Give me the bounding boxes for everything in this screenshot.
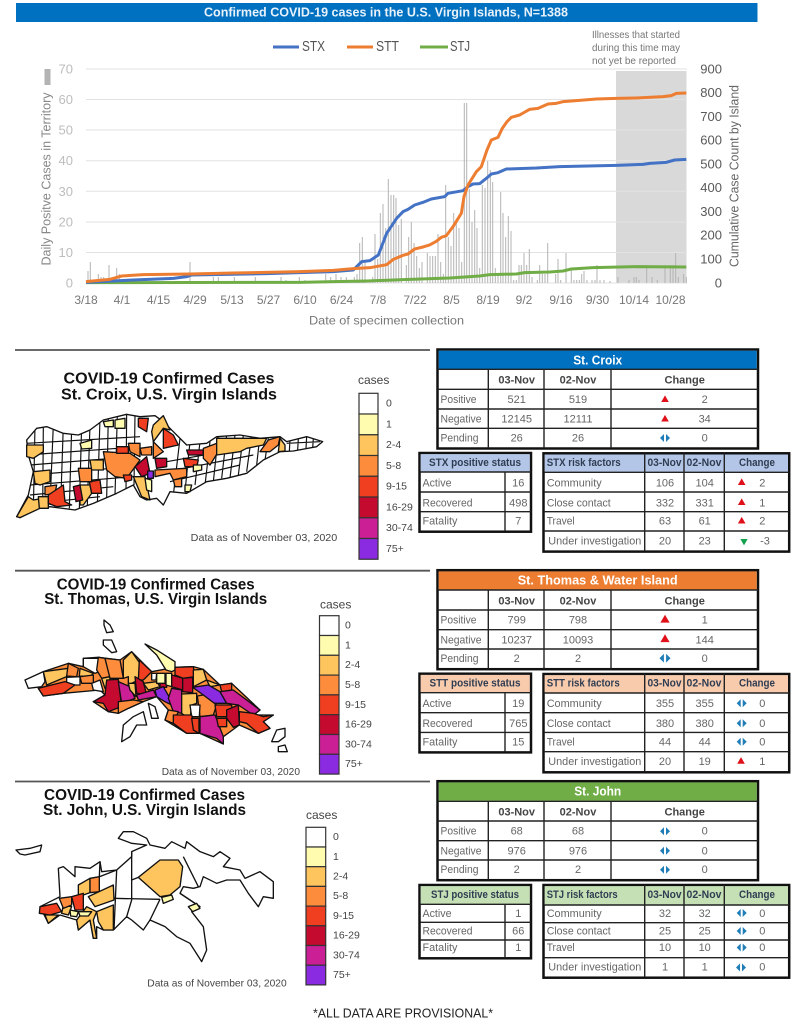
legend: cases xyxy=(306,808,360,985)
row: Recovered: 66 xyxy=(512,926,524,938)
row: Positive xyxy=(440,826,708,838)
legend: cases xyxy=(358,373,413,559)
row: Community: 355 xyxy=(656,698,674,710)
column headers: 03-Nov xyxy=(498,375,536,387)
x axis date labels: 5/13 xyxy=(220,293,244,307)
table: STJ positive status xyxy=(420,885,531,958)
left axis ticks: 30 xyxy=(59,184,73,199)
map title: COVID-19 Confirmed Cases xyxy=(44,787,245,804)
row: Pending: Pending xyxy=(440,432,478,444)
row: Pending xyxy=(440,432,708,444)
row: Close contact: Close contact xyxy=(547,718,611,730)
table header: Change xyxy=(739,457,775,469)
table header xyxy=(547,678,775,690)
row: Close contact: 380 xyxy=(656,718,674,730)
row: Recovered: 765 xyxy=(509,718,527,730)
row: Community: Community xyxy=(547,908,602,920)
row: Close contact: Close contact xyxy=(547,497,611,509)
row: Pending: 2 xyxy=(575,653,581,665)
row: Recovered: 498 xyxy=(509,497,527,509)
table header: 02-Nov xyxy=(686,457,722,469)
row: Active: 1 xyxy=(515,908,521,920)
table title: St. Thomas & Water Island xyxy=(518,572,678,587)
row: Under investigation: Under investigation xyxy=(548,535,641,547)
legend: cases: 30-74 xyxy=(386,522,413,534)
table: St. Croix testing xyxy=(438,350,758,448)
row: Pending: Pending xyxy=(440,864,478,876)
row: Travel: 10 xyxy=(699,942,711,954)
legend: cases: 2-4 xyxy=(345,659,360,671)
title banner: Confirmed COVID-19 cases in the U.S. Virgin Islands, N=1388 xyxy=(204,6,568,20)
x axis date labels: 8/19 xyxy=(476,293,500,307)
map title: COVID-19 Confirmed Cases xyxy=(64,370,274,388)
row: Close contact: 332 xyxy=(656,497,674,509)
panel: St. Croix map xyxy=(17,370,413,559)
row: Positive: 799 xyxy=(508,615,526,627)
table header: 03-Nov xyxy=(648,889,682,901)
annotation: reporting lag: during this time may xyxy=(592,43,680,54)
row: Fatality xyxy=(422,516,521,528)
row: Under investigation xyxy=(548,756,765,768)
row: Fatality: 7 xyxy=(515,516,521,528)
legend: cases: 30-74 xyxy=(333,949,360,961)
x axis date labels xyxy=(74,293,686,307)
table header xyxy=(547,457,775,469)
x axis date labels: 4/15 xyxy=(147,293,171,307)
row: Community: 106 xyxy=(656,477,674,489)
row: Positive xyxy=(440,615,708,627)
table header: STT risk factors xyxy=(547,678,620,690)
x axis date labels: 8/5 xyxy=(443,293,460,307)
left axis ticks: 0 xyxy=(66,276,73,290)
row: Negative: 976 xyxy=(569,845,587,857)
table: STT positive status xyxy=(420,674,531,752)
row: Pending: 0 xyxy=(702,864,708,876)
row: Travel: 44 xyxy=(699,736,711,748)
row: Community: 0 xyxy=(759,698,765,710)
legend: cases: 0 xyxy=(345,620,351,632)
row: Negative: Negative xyxy=(440,414,482,426)
title banner xyxy=(16,3,758,22)
row: Active: Active xyxy=(422,477,452,489)
legend: cases: 16-29 xyxy=(386,501,413,513)
row: Recovered xyxy=(422,926,524,938)
row: Positive: 519 xyxy=(569,394,587,406)
legend: cases: 75+ xyxy=(345,758,363,770)
x axis date labels: 9/16 xyxy=(549,293,573,307)
table header: 02-Nov xyxy=(686,678,722,690)
row: Under investigation: 0 xyxy=(759,962,765,974)
row: Under investigation: -3 xyxy=(760,535,770,547)
row: Close contact: 0 xyxy=(759,926,765,938)
line and bar chart: daily and cumulative cases xyxy=(40,30,742,328)
row: Negative xyxy=(440,414,711,426)
row: Positive xyxy=(440,394,708,406)
column headers: Change xyxy=(665,375,705,387)
left axis ticks: 40 xyxy=(59,153,73,168)
row: Pending: 26 xyxy=(572,432,584,444)
row: Under investigation xyxy=(548,535,770,547)
x axis date labels: 9/2 xyxy=(516,293,533,307)
row: Under investigation: 1 xyxy=(662,962,668,974)
legend: cases xyxy=(320,598,372,774)
row: Active xyxy=(422,908,521,920)
right axis ticks: 100 xyxy=(700,252,722,266)
right axis ticks: 300 xyxy=(700,204,722,219)
legend: cases: 2-4 xyxy=(386,439,401,451)
row: Pending: 26 xyxy=(511,432,523,444)
row: Pending: Pending xyxy=(440,653,478,665)
x axis date labels: 4/1 xyxy=(114,293,131,307)
row: Recovered xyxy=(422,718,527,730)
row: Travel: 44 xyxy=(659,736,671,748)
map title: St. Thomas, U.S. Virgin Islands xyxy=(44,591,267,608)
cumulative lines xyxy=(86,93,686,283)
row: Positive: Positive xyxy=(440,826,476,838)
row: Positive: 0 xyxy=(702,826,708,838)
right axis ticks: 0 xyxy=(715,276,722,290)
row: Active: Active xyxy=(422,908,452,920)
row: Positive: 798 xyxy=(569,615,587,627)
table: STX risk factors xyxy=(544,453,789,552)
map title: St. John, U.S. Virgin Islands xyxy=(43,802,246,819)
table: STT risk factors xyxy=(544,674,789,772)
row: Positive: 68 xyxy=(572,826,584,838)
left axis ticks: 50 xyxy=(59,122,73,138)
row: Under investigation: 20 xyxy=(659,756,671,768)
row: Negative: 34 xyxy=(699,414,711,426)
legend: cases: cases xyxy=(306,808,337,822)
x axis title: Date of specimen collection xyxy=(309,314,464,328)
data date note: Data as of November 03, 2020 xyxy=(191,532,337,544)
line: STJ cumulative xyxy=(86,267,686,283)
row: Community: 32 xyxy=(659,908,671,920)
row: Close contact xyxy=(547,718,765,730)
row: Negative: 12111 xyxy=(564,414,592,426)
annotation: reporting lag: Illnesses that started xyxy=(592,30,680,41)
table header xyxy=(547,889,775,901)
row: Community: 2 xyxy=(759,477,765,489)
legend: cases: 2-4 xyxy=(333,870,348,882)
panel: St. Thomas map xyxy=(25,576,372,778)
legend: cases: 5-8 xyxy=(345,679,360,691)
row: Fatality: Fatality xyxy=(422,736,458,748)
row: Active: Active xyxy=(422,698,452,710)
row: Travel: 0 xyxy=(759,736,765,748)
row: Community: 0 xyxy=(759,908,765,920)
row: Negative: 12145 xyxy=(501,414,532,426)
row: Positive: 2 xyxy=(702,394,708,406)
legend: cases: 75+ xyxy=(333,969,351,981)
table header: 02-Nov xyxy=(686,889,722,901)
row: Community: Community xyxy=(547,698,602,710)
x axis date labels: 6/10 xyxy=(293,293,317,307)
row: Recovered: Recovered xyxy=(422,718,472,730)
annotation: reporting lag xyxy=(592,30,680,67)
table: STJ risk factors xyxy=(544,885,789,978)
table header: 03-Nov xyxy=(648,457,682,469)
row: Negative: Negative xyxy=(440,845,482,857)
row: Pending xyxy=(440,864,708,876)
row: Close contact: 25 xyxy=(659,926,671,938)
row: Travel xyxy=(547,942,765,954)
column headers xyxy=(498,375,705,387)
row: Close contact: 0 xyxy=(759,718,765,730)
table header: STJ positive status xyxy=(431,889,519,901)
row: Pending xyxy=(440,653,708,665)
row: Under investigation: 23 xyxy=(699,535,711,547)
row: Negative: Negative xyxy=(440,634,482,646)
column headers xyxy=(498,806,705,818)
legend: STX xyxy=(302,39,325,55)
row: Negative: 976 xyxy=(508,845,526,857)
map title xyxy=(61,370,277,404)
row: Under investigation: 20 xyxy=(659,535,671,547)
row: Travel: 2 xyxy=(759,516,765,528)
column headers: 03-Nov xyxy=(498,806,536,818)
legend: cases: 9-15 xyxy=(345,699,366,711)
row: Pending: 0 xyxy=(702,653,708,665)
map title: COVID-19 Confirmed Cases xyxy=(57,576,255,594)
table header: Change xyxy=(739,889,775,901)
annotation: reporting lag: not yet be reported xyxy=(592,56,676,67)
row: Under investigation: Under investigation xyxy=(548,962,641,974)
right axis ticks xyxy=(700,62,722,290)
row: Fatality: Fatality xyxy=(422,516,458,528)
row: Positive: 1 xyxy=(702,615,708,627)
legend: cases: 1 xyxy=(345,639,351,651)
right axis ticks: 400 xyxy=(700,180,722,195)
legend: cases: 16-29 xyxy=(345,719,372,731)
footer note: *ALL DATA ARE PROVISIONAL* xyxy=(313,1006,493,1020)
row: Close contact: 331 xyxy=(696,497,714,509)
right axis ticks: 600 xyxy=(700,133,722,148)
row: Positive: Positive xyxy=(440,394,476,406)
legend: STT xyxy=(376,39,399,55)
panel: St. John map xyxy=(16,787,360,989)
legend: cases: 1 xyxy=(333,851,339,863)
row: Close contact xyxy=(547,926,765,938)
row: Fatality xyxy=(422,736,524,748)
right axis ticks: 500 xyxy=(700,156,722,172)
row: Travel: Travel xyxy=(547,516,575,528)
legend: STJ xyxy=(450,39,470,55)
row: Fatality: 1 xyxy=(515,942,521,954)
data date note: Data as of November 03, 2020 xyxy=(147,977,287,989)
left axis ticks: 20 xyxy=(59,214,73,230)
legend xyxy=(273,39,470,55)
row: Positive: Positive xyxy=(440,615,476,627)
row: Negative: 0 xyxy=(702,845,708,857)
row: Travel xyxy=(547,736,765,748)
column headers: Change xyxy=(665,595,705,607)
row: Travel: 61 xyxy=(699,516,711,528)
row: Pending: 2 xyxy=(514,864,520,876)
legend: cases: 0 xyxy=(386,398,392,410)
row: Negative xyxy=(440,845,708,857)
legend: cases: 9-15 xyxy=(333,910,354,922)
table header: STT positive status xyxy=(430,678,520,690)
data date note: Data as of November 03, 2020 xyxy=(162,766,300,778)
choropleth map: St. John xyxy=(16,832,273,962)
row: Recovered xyxy=(422,497,527,509)
row: Close contact: 25 xyxy=(699,926,711,938)
column headers: 02-Nov xyxy=(560,595,597,607)
table: St. John testing xyxy=(438,781,758,880)
row: Fatality: 15 xyxy=(512,736,524,748)
x axis date labels: 4/29 xyxy=(183,293,207,307)
table header: STX positive status xyxy=(429,457,521,469)
right axis ticks: 800 xyxy=(700,85,722,100)
column headers: 02-Nov xyxy=(560,375,597,387)
legend: cases: 75+ xyxy=(386,543,404,555)
table: St. Thomas testing xyxy=(438,570,758,669)
row: Pending: 2 xyxy=(514,653,520,665)
row: Under investigation: 19 xyxy=(699,756,711,768)
right axis ticks: 900 xyxy=(700,62,722,76)
legend: cases: cases xyxy=(358,373,389,387)
left axis title: Daily Positve Cases in Territory xyxy=(40,92,54,266)
row: Pending: 2 xyxy=(575,864,581,876)
left axis ticks: 10 xyxy=(59,245,73,260)
row: Travel: 10 xyxy=(659,942,671,954)
table title: St. John xyxy=(574,784,621,798)
table title: St. Croix xyxy=(573,352,623,367)
left axis ticks: 70 xyxy=(59,62,73,76)
row: Under investigation: 1 xyxy=(759,756,765,768)
right axis ticks: 200 xyxy=(700,228,722,243)
row: Positive: 68 xyxy=(511,826,523,838)
row: Under investigation xyxy=(548,962,765,974)
table header: STJ risk factors xyxy=(547,889,618,901)
row: Close contact xyxy=(547,497,765,509)
choropleth map: St. Croix xyxy=(17,412,323,518)
legend: cases: cases xyxy=(320,598,351,612)
table header: 03-Nov xyxy=(648,678,682,690)
right axis ticks: 700 xyxy=(700,109,722,124)
row: Negative xyxy=(440,634,714,646)
table header: STX risk factors xyxy=(547,457,621,469)
row: Recovered: Recovered xyxy=(422,497,472,509)
row: Close contact: 380 xyxy=(696,718,714,730)
legend: cases: 1 xyxy=(386,418,392,430)
left axis ticks xyxy=(59,62,73,290)
column headers xyxy=(498,595,705,607)
choropleth map: St. Thomas xyxy=(25,620,287,752)
left axis ticks: 60 xyxy=(59,92,73,107)
row: Active xyxy=(422,698,524,710)
column headers: 02-Nov xyxy=(560,806,597,818)
row: Under investigation: 1 xyxy=(702,962,708,974)
row: Community xyxy=(547,477,765,489)
row: Negative: 10093 xyxy=(563,634,593,646)
row: Fatality xyxy=(422,942,521,954)
map title: St. Croix, U.S. Virgin Islands xyxy=(61,386,277,404)
row: Community: 104 xyxy=(696,477,714,489)
legend: cases: 5-8 xyxy=(386,460,401,472)
map title xyxy=(43,787,246,819)
row: Under investigation: Under investigation xyxy=(548,756,641,768)
legend: cases: 9-15 xyxy=(386,481,407,493)
x axis date labels: 5/27 xyxy=(257,293,281,307)
x axis date labels: 7/22 xyxy=(403,293,427,307)
table header: Change xyxy=(739,678,775,690)
row: Negative: 144 xyxy=(696,634,714,646)
x axis date labels: 10/14 xyxy=(619,293,649,307)
row: Travel xyxy=(547,516,765,528)
tables: St. Thomas group xyxy=(420,570,789,772)
row: Community: 32 xyxy=(699,908,711,920)
row: Community: 355 xyxy=(696,698,714,710)
daily positive case bars xyxy=(88,103,686,283)
legend: cases: 5-8 xyxy=(333,890,348,902)
shaded reporting-lag band xyxy=(616,71,686,283)
row: Active: 19 xyxy=(512,698,524,710)
row: Active: 16 xyxy=(512,477,524,489)
row: Negative: 10237 xyxy=(501,634,532,646)
row: Travel: Travel xyxy=(547,736,575,748)
row: Community xyxy=(547,698,765,710)
row: Positive: 521 xyxy=(508,394,526,406)
legend: cases: 0 xyxy=(333,831,339,843)
right axis title: Cumulative Case Count by Island xyxy=(728,85,742,267)
column headers: 03-Nov xyxy=(498,595,536,607)
row: Close contact: Close contact xyxy=(547,926,611,938)
x axis date labels: 7/8 xyxy=(370,293,387,307)
column headers: Change xyxy=(665,806,705,818)
row: Community: Community xyxy=(547,477,602,489)
row: Travel: 0 xyxy=(759,942,765,954)
row: Fatality: Fatality xyxy=(422,942,458,954)
row: Active xyxy=(422,477,524,489)
x axis date labels: 3/18 xyxy=(74,293,98,307)
map title xyxy=(44,576,267,608)
line: STT cumulative xyxy=(86,93,686,282)
line: STX cumulative xyxy=(86,159,686,282)
legend: cases: 30-74 xyxy=(345,738,372,750)
row: Community xyxy=(547,908,765,920)
x axis date labels: 6/24 xyxy=(330,293,354,307)
table: STX positive status xyxy=(420,453,531,532)
row: Close contact: 1 xyxy=(759,497,765,509)
row: Travel: 63 xyxy=(659,516,671,528)
legend: cases: 16-29 xyxy=(333,930,360,942)
row: Pending: 0 xyxy=(702,432,708,444)
x axis date labels: 10/28 xyxy=(655,293,686,307)
x axis date labels: 9/30 xyxy=(586,293,610,307)
row: Recovered: Recovered xyxy=(422,926,472,938)
row: Travel: Travel xyxy=(547,942,575,954)
